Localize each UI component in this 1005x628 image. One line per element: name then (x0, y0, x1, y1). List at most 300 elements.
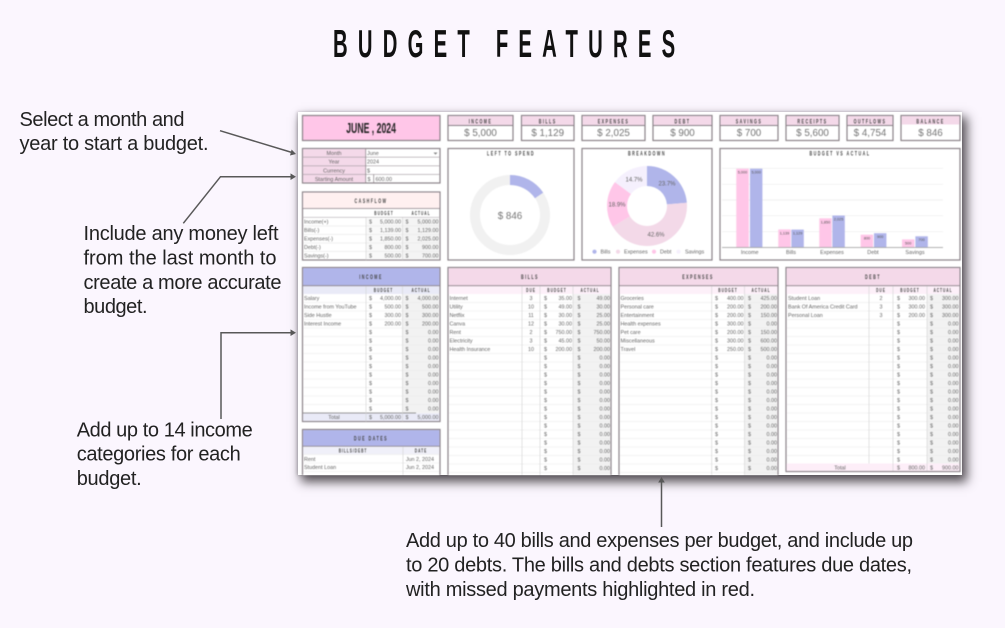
panel: month settings form: June (367, 151, 379, 157)
table: debt: $ (897, 330, 900, 336)
table: expenses: $ (748, 390, 751, 396)
table: expenses: $ (715, 398, 718, 404)
panel: cashflow: Expenses(-) (304, 237, 333, 243)
table: bills: 50.00 (596, 338, 610, 344)
table: expenses: $ (715, 296, 718, 302)
bar chart: budget vs actual: Bills (786, 250, 796, 256)
table: bills: 200.00 (556, 347, 572, 353)
table: income: 0.00 (428, 372, 438, 378)
annotation: bills and debts: with missed payments highlighted in red. (405, 579, 755, 601)
table: bills: Health Insurance (450, 347, 490, 353)
table: expenses: 300.00 (727, 338, 744, 344)
legend: breakdown (592, 250, 704, 256)
panel: cashflow: $ (406, 253, 408, 259)
table: income: $ (369, 322, 372, 328)
table: bills: 200.00 (594, 347, 610, 353)
table: debt: $ (930, 364, 933, 370)
table: debt: 0.00 (948, 322, 958, 328)
table: due dates: Student Loan (304, 465, 336, 471)
table: expenses: 300.00 (727, 322, 744, 328)
table: bills: $ (578, 406, 580, 412)
table: expenses: $ (748, 347, 751, 353)
table: bills: $ (578, 466, 580, 472)
panel: cashflow: $ (406, 245, 408, 251)
table: bills: 0.00 (600, 424, 610, 430)
table: debt: BUDGET (900, 287, 920, 293)
table: income: $ (406, 406, 408, 412)
table: income: ACTUAL (411, 287, 431, 293)
table: debt: $ (930, 415, 933, 421)
table: income: $ (406, 356, 408, 362)
annotation: income categories (77, 420, 253, 490)
table: bills: 10 (528, 304, 534, 310)
annotation: select month: Select a month and (20, 109, 184, 131)
table: bills: $ (578, 330, 580, 336)
table: income: $ (369, 338, 372, 344)
table: debt: Total (834, 466, 846, 472)
table: expenses: Pet care (620, 330, 641, 336)
table: expenses: $ (748, 356, 751, 362)
table: bills: $ (578, 424, 580, 430)
legend: breakdown: Debt (660, 250, 672, 256)
donut chart: breakdown: 14.7% (625, 178, 643, 184)
table: bills: 30.00 (558, 322, 572, 328)
table: debt: $ (897, 458, 900, 464)
table: expenses: $ (715, 372, 718, 378)
panel: cashflow: $ (369, 220, 372, 226)
table: due dates (302, 430, 440, 475)
table: debt: $ (897, 440, 900, 446)
panel: cashflow: $ (406, 237, 408, 243)
panel: cashflow: $ (369, 228, 372, 234)
panel: month settings form: 600.00 (376, 177, 392, 183)
bar chart: budget vs actual: Savings (905, 250, 925, 256)
table: income: 5,000.00 (380, 415, 401, 421)
table: income: $ (406, 390, 408, 396)
table: debt: $ (930, 406, 933, 412)
table: expenses: $ (715, 390, 718, 396)
bar chart: budget vs actual: 800 (864, 236, 870, 240)
table: expenses: $ (748, 296, 751, 302)
table: debt: 0.00 (948, 381, 958, 387)
bar chart: budget vs actual: 5,000 (751, 170, 761, 174)
table: debt: $ (930, 347, 933, 353)
card: income (448, 116, 513, 140)
table: income: $ (406, 364, 408, 370)
table: bills: 11 (528, 313, 534, 319)
table: income: BUDGET (374, 287, 393, 293)
table: income: 0.00 (428, 356, 438, 362)
card: receipts: RECEIPTS (797, 118, 828, 126)
table: debt: ACTUAL (933, 287, 953, 293)
panel: cashflow: Savings(-) (304, 253, 329, 259)
table: expenses: 0.00 (766, 322, 777, 328)
panel: cashflow: Bills(-) (304, 228, 319, 234)
table: bills: Internet (450, 296, 468, 302)
table: debt: $ (930, 440, 933, 446)
table: income: 0.00 (428, 338, 438, 344)
table: income: Salary (304, 296, 320, 302)
card: balance: BALANCE (916, 118, 945, 126)
table: bills: Electricity (450, 338, 473, 344)
card: bills (522, 116, 574, 140)
table: debt: DUE (876, 287, 886, 293)
panel: cashflow: ACTUAL (411, 210, 431, 216)
panel: cashflow: 1,129.00 (418, 228, 439, 234)
bar chart: budget vs actual: 700 (918, 238, 925, 242)
table: debt: 300.00 (908, 296, 925, 302)
table: expenses: 0.00 (766, 390, 777, 396)
card: expenses (582, 116, 645, 140)
table: expenses: 0.00 (766, 440, 777, 446)
bar chart: budget vs actual: 2,025 (834, 218, 843, 222)
table: income: $ (369, 364, 372, 370)
table: bills: $ (544, 432, 547, 438)
arrow: income table (221, 329, 296, 419)
card: savings (720, 116, 778, 140)
annotation: bills and debts: to 20 debts. The bills and debts section features due dates, (406, 554, 912, 576)
table: bills: 49.00 (558, 304, 572, 310)
table: expenses: 150.00 (760, 330, 777, 336)
legend: breakdown: Bills (600, 250, 611, 256)
panel: month settings form: Starting Amount (315, 177, 354, 183)
table: bills: $ (578, 322, 580, 328)
table: bills: 0.00 (600, 432, 610, 438)
table: income: $ (406, 415, 408, 421)
card: bills: BILLS (539, 118, 557, 126)
table: expenses: $ (748, 338, 751, 344)
table: income: INCOME (359, 274, 383, 281)
table: debt: 0.00 (948, 406, 958, 412)
table: bills: $ (578, 432, 580, 438)
table: debt: $ (930, 449, 933, 455)
table: debt: 0.00 (948, 330, 958, 336)
table: debt: $ (930, 330, 933, 336)
table: debt: 300.00 (942, 313, 958, 319)
table: bills: 0.00 (600, 415, 610, 421)
table: bills: 49.00 (596, 296, 610, 302)
table: expenses: 0.00 (766, 356, 777, 362)
table: debt: Student Loan (788, 296, 820, 302)
table: income: $ (369, 415, 372, 421)
table: expenses: Entertainment (620, 313, 655, 319)
table: expenses: $ (715, 356, 718, 362)
table: income: $ (369, 372, 372, 378)
table: debt: $ (930, 356, 933, 362)
donut chart: breakdown: 18.9% (608, 202, 626, 208)
table: bills: $ (578, 364, 580, 370)
table: debt: 0.00 (948, 432, 958, 438)
panel: cashflow: 900.00 (422, 245, 438, 251)
panel: month settings form: 2024 (367, 160, 379, 166)
table: income: 0.00 (428, 347, 438, 353)
table: income: 4,000.00 (380, 296, 401, 302)
panel: cashflow: 1,139.00 (380, 228, 401, 234)
table: income: $ (369, 381, 372, 387)
table: income: $ (406, 313, 408, 319)
table: expenses: Health expenses (620, 322, 661, 328)
table: income: 0.00 (428, 406, 438, 412)
card: bills: $ 1,129 (531, 128, 564, 139)
table: debt: 0.00 (948, 372, 958, 378)
table: debt: 0.00 (948, 347, 958, 353)
panel: cashflow: $ (369, 237, 372, 243)
table: debt: $ (897, 322, 900, 328)
table: expenses: 0.00 (766, 458, 777, 464)
table: expenses: $ (748, 415, 751, 421)
card: savings: SAVINGS (736, 118, 762, 126)
table: debt: $ (897, 398, 900, 404)
table: debt: $ (930, 304, 933, 310)
table: expenses: $ (748, 381, 751, 387)
table: bills: $ (544, 424, 547, 430)
table: expenses: 200.00 (727, 330, 744, 336)
annotation: bills and debts (405, 530, 913, 601)
table: expenses: $ (748, 466, 751, 472)
annotation: income categories: categories for each (77, 444, 241, 466)
bar chart: budget vs actual: 1,139 (780, 232, 789, 236)
table: expenses: $ (748, 364, 751, 370)
table: debt: 0.00 (948, 424, 958, 430)
table: debt: $ (897, 304, 900, 310)
table: expenses: $ (715, 449, 718, 455)
table: bills: $ (578, 398, 580, 404)
table: debt: 0.00 (948, 458, 958, 464)
table: expenses: $ (715, 458, 718, 464)
table: debt: $ (930, 296, 933, 302)
card: income: $ 5,000 (464, 128, 497, 139)
table: income: Total (328, 415, 340, 421)
table: bills: 35.00 (558, 296, 572, 302)
table: expenses: 150.00 (760, 313, 777, 319)
table: due dates: Rent (304, 457, 316, 463)
table: expenses: $ (748, 458, 751, 464)
table: debt: $ (930, 322, 933, 328)
table: income: $ (406, 398, 408, 404)
table: bills: 45.00 (558, 338, 572, 344)
table: debt: 800.00 (908, 466, 925, 472)
bar chart: budget vs actual: Expenses (820, 250, 844, 256)
table: income: 4,000.00 (418, 296, 439, 302)
table: expenses: 500.00 (760, 347, 777, 353)
table: expenses: $ (715, 440, 718, 446)
table: bills: 2 (530, 330, 532, 336)
annotation: select month (20, 109, 208, 155)
table: expenses: Travel (620, 347, 635, 353)
table: income: 0.00 (428, 330, 438, 336)
table: bills: $ (544, 322, 547, 328)
bar chart: budget vs actual: Debt (867, 250, 879, 256)
table: bills: $ (578, 356, 580, 362)
table: bills: $ (544, 296, 547, 302)
panel: left to spend (448, 148, 574, 260)
table: income: Income from YouTube (304, 304, 357, 310)
table: bills: $ (578, 415, 580, 421)
table: debt: $ (897, 390, 900, 396)
card: debt: DEBT (675, 118, 690, 126)
table: bills: 25.00 (596, 313, 610, 319)
table: income: $ (406, 338, 408, 344)
table: income: $ (369, 296, 372, 302)
table: due dates: BILLS/DEBT (339, 448, 367, 454)
table: income: $ (369, 313, 372, 319)
table: bills: $ (578, 296, 580, 302)
table: due dates: Jun 2, 2024 (406, 457, 434, 463)
table: bills: $ (578, 338, 580, 344)
table: expenses: $ (748, 406, 751, 412)
table: expenses (619, 268, 778, 475)
table: bills: $ (544, 347, 547, 353)
table: income: 0.00 (428, 390, 438, 396)
table: debt: 0.00 (948, 440, 958, 446)
table: expenses: $ (715, 330, 718, 336)
card: outflows (847, 116, 893, 140)
table: bills: $ (544, 406, 547, 412)
table: bills: 3 (530, 296, 532, 302)
table: expenses: 200.00 (727, 313, 744, 319)
table: income: $ (406, 304, 408, 310)
table: bills: $ (578, 458, 580, 464)
table: debt: 0.00 (948, 390, 958, 396)
table: bills: $ (578, 449, 580, 455)
table: income: $ (406, 296, 408, 302)
table: bills: DUE (526, 287, 536, 293)
annotation: income categories: Add up to 14 income (77, 420, 253, 442)
table: bills: 10 (528, 347, 534, 353)
table: income (302, 268, 440, 422)
table: expenses: Personal care (620, 304, 654, 310)
card: expenses: $ 2,025 (597, 128, 630, 139)
table: income: $ (406, 322, 408, 328)
table: bills: 0.00 (600, 458, 610, 464)
table: debt: $ (930, 338, 933, 344)
bar chart: budget vs actual: Income (741, 250, 759, 256)
donut: left to spend (475, 175, 545, 250)
table: debt: 300.00 (908, 304, 925, 310)
table: bills: 0.00 (600, 356, 610, 362)
table: expenses: $ (748, 440, 751, 446)
table: debt: $ (897, 364, 900, 370)
table: expenses: $ (715, 313, 718, 319)
card: receipts: $ 5,600 (796, 128, 829, 139)
table: debt: 0.00 (948, 398, 958, 404)
card: debt: $ 900 (670, 128, 695, 139)
table: bills: 0.00 (600, 466, 610, 472)
table: bills: $ (544, 330, 547, 336)
table: expenses: 600.00 (760, 338, 777, 344)
table: income: 500.00 (384, 304, 401, 310)
table: due dates: Jun 2, 2024 (406, 465, 434, 471)
table: debt: $ (930, 381, 933, 387)
table: debt: $ (930, 458, 933, 464)
panel: cashflow: 5,000.00 (380, 220, 401, 226)
panel: budget vs actual: BUDGET VS ACTUAL (810, 151, 870, 158)
panel: budget vs actual (720, 148, 960, 260)
annotation: bills and debts: Add up to 40 bills and expenses per budget, and include up (406, 530, 913, 552)
legend: breakdown: Savings (685, 250, 704, 256)
table: bills: 0.00 (600, 440, 610, 446)
table: debt: DEBT (865, 274, 881, 281)
panel: cashflow: Income(+) (304, 220, 329, 226)
table: debt: $ (897, 313, 900, 319)
table: expenses: 200.00 (727, 304, 744, 310)
annotation: starting amount: Include any money left (84, 223, 279, 245)
table: expenses: 0.00 (766, 398, 777, 404)
table: debt: 0.00 (948, 415, 958, 421)
table: bills: 12 (528, 322, 534, 328)
table: expenses: EXPENSES (682, 274, 714, 281)
annotation: starting amount (84, 223, 282, 318)
table: income: 5,000.00 (418, 415, 439, 421)
table: debt: 0.00 (948, 449, 958, 455)
table: bills (448, 268, 611, 475)
table: debt: 3 (880, 313, 882, 319)
panel: left to spend: $ 846 (498, 211, 523, 222)
table: debt: Personal Loan (788, 313, 823, 319)
table: debt: $ (897, 424, 900, 430)
table: expenses: 0.00 (766, 372, 777, 378)
card: balance (901, 116, 960, 140)
table: bills: $ (578, 390, 580, 396)
table: expenses: Miscellaneous (620, 338, 655, 344)
table: expenses: $ (748, 424, 751, 430)
table: debt: 200.00 (908, 313, 925, 319)
table: income: $ (369, 347, 372, 353)
table: bills: 0.00 (600, 381, 610, 387)
panel: cashflow: $ (369, 253, 372, 259)
table: bills: 3 (530, 338, 532, 344)
table: bills: ACTUAL (580, 287, 600, 293)
annotation: income categories: budget. (77, 468, 142, 490)
table: bills: $ (544, 304, 547, 310)
table: expenses: 0.00 (766, 424, 777, 430)
table: bills: $ (544, 364, 547, 370)
table: bills: $ (544, 466, 547, 472)
table: debt: $ (897, 415, 900, 421)
panel: cashflow: Debt(-) (304, 245, 321, 251)
table: debt: 0.00 (948, 338, 958, 344)
panel: cashflow: $ (406, 228, 408, 234)
panel: left to spend: LEFT TO SPEND (487, 151, 535, 158)
panel: cashflow: CASHFLOW (354, 198, 388, 205)
table: debt: $ (897, 432, 900, 438)
table: bills: $ (544, 415, 547, 421)
table: expenses: $ (715, 466, 718, 472)
table: debt: $ (897, 449, 900, 455)
table: expenses: 400.00 (727, 296, 744, 302)
table: expenses: 0.00 (766, 449, 777, 455)
table: bills: $ (544, 449, 547, 455)
table: income: $ (369, 304, 372, 310)
table: income: 0.00 (428, 398, 438, 404)
table: bills: Canva (450, 322, 465, 328)
table: expenses: $ (748, 449, 751, 455)
annotation: starting amount: from the last month to (84, 248, 276, 270)
table: expenses: $ (748, 304, 751, 310)
panel: cashflow: 1,850.00 (380, 237, 401, 243)
table: income: 200.00 (422, 322, 438, 328)
table: debt: $ (897, 466, 900, 472)
panel: cashflow: $ (406, 220, 408, 226)
table: expenses: $ (715, 304, 718, 310)
annotation: select month: year to start a budget. (20, 133, 208, 155)
table: expenses: ACTUAL (751, 287, 771, 293)
table: bills: $ (544, 372, 547, 378)
panel: breakdown (582, 148, 712, 260)
table: debt: $ (930, 432, 933, 438)
table: bills: 0.00 (600, 372, 610, 378)
table: bills: Netflix (450, 313, 465, 319)
